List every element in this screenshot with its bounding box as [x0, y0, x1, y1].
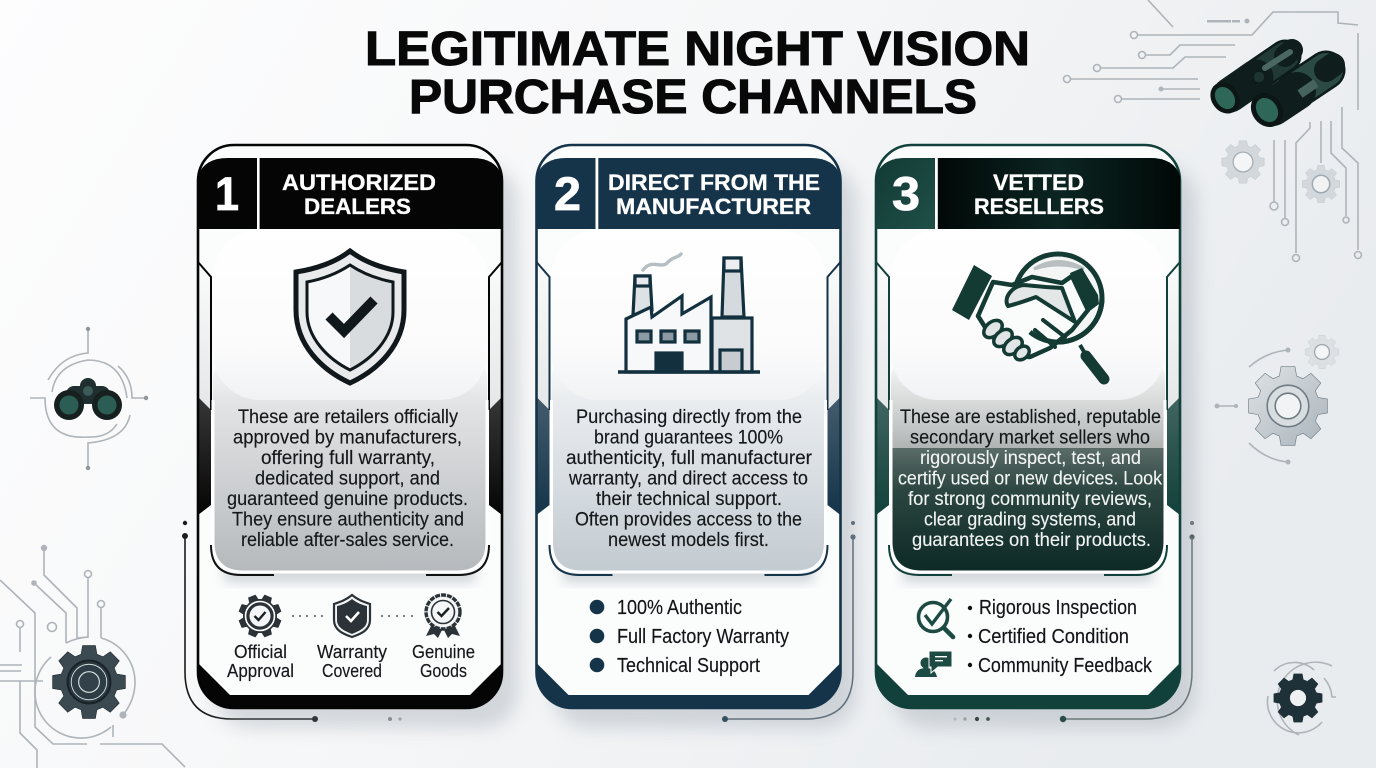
card 3 heading: VETTED	[993, 170, 1084, 195]
card 1 icon labels	[227, 642, 475, 681]
title: PURCHASE CHANNELS	[409, 71, 977, 124]
icon: gear top right 2	[1302, 165, 1340, 203]
icon: dark gear bottom left	[53, 646, 125, 718]
card 2 heading	[608, 170, 820, 219]
card 2 bullet list: Technical Support	[617, 655, 760, 677]
icon: night vision binoculars top right	[1204, 50, 1333, 133]
panel: card 2 direct from the manufacturer	[536, 145, 856, 728]
card 3 connector line	[954, 521, 1195, 722]
card 3 bullet list	[968, 597, 1153, 677]
card 3 heading: RESELLERS	[974, 194, 1104, 219]
card 2 description text: warranty, and direct access to	[568, 468, 808, 490]
card 3 number cell: 3	[892, 167, 920, 220]
icon: factory	[618, 254, 760, 372]
card 1 description panel	[211, 230, 489, 575]
card 1 description text: They ensure authenticity and	[232, 510, 464, 530]
card 1 description text	[227, 407, 468, 551]
card 1 heading: AUTHORIZED	[282, 170, 436, 195]
card 3 description text: These are established, reputable	[900, 407, 1161, 428]
card 1 icon labels: Approval	[227, 661, 294, 681]
card 3 bullet list: Certified Condition	[978, 626, 1129, 648]
card 1 number cell	[215, 158, 260, 229]
card 3 description text: for strong community reviews,	[908, 489, 1152, 510]
icon: inspection magnifier	[918, 599, 953, 637]
card 3 description text: clear grading systems, and	[924, 510, 1136, 530]
panel: card 3 vetted resellers	[876, 145, 1196, 728]
card 2 connector line	[722, 521, 856, 722]
card 1 number cell: 1	[215, 167, 239, 220]
card 3 bullet list: Rigorous Inspection	[979, 597, 1137, 619]
card 3 heading	[974, 170, 1104, 219]
title: LEGITIMATE NIGHT VISION	[365, 23, 1030, 76]
card 1 heading	[282, 170, 436, 219]
card 2 description text: Often provides access to the	[575, 510, 802, 530]
card 3 description text: secondary market sellers who	[910, 428, 1150, 448]
card 3 description panel	[889, 230, 1167, 575]
dotted connector 2	[381, 615, 413, 617]
dotted connector 1	[292, 615, 323, 617]
card 2 description text: brand guarantees 100%	[594, 428, 783, 448]
card 1 connector line	[182, 521, 402, 722]
card 1 description text: dedicated support, and	[255, 468, 440, 490]
icon: dark gear bottom right	[1267, 662, 1336, 735]
card 1 icon labels: Covered	[322, 661, 382, 681]
card 2 heading: MANUFACTURER	[616, 194, 811, 219]
card 1 description text: guaranteed genuine products.	[227, 489, 468, 510]
card 1 icon labels: Official	[234, 642, 287, 662]
icon: genuine goods ribbon	[426, 595, 460, 638]
card 1 heading: DEALERS	[304, 194, 411, 219]
circuit decoration: top right	[1064, 0, 1362, 262]
card 2 description text: newest models first.	[608, 530, 769, 551]
card 2 description text	[566, 407, 813, 551]
card 3 frame	[876, 145, 1196, 728]
card 2 description text: their technical support.	[596, 489, 782, 510]
icon: community feedback	[915, 651, 952, 677]
icon: gear top right 1	[1222, 141, 1264, 183]
card 1 icon labels: Goods	[420, 661, 467, 681]
card 1 description text: offering full warranty,	[261, 448, 435, 469]
icon: shield with check	[296, 251, 404, 383]
card 1 icon labels: Genuine	[412, 642, 475, 662]
icon: binoculars left with target rings	[30, 327, 148, 470]
card 2 heading: DIRECT FROM THE	[608, 170, 820, 195]
icon: handshake with magnifier	[952, 254, 1104, 379]
card 2 number cell: 2	[554, 167, 581, 220]
card 3 description text	[898, 407, 1162, 551]
card 2 frame	[536, 145, 856, 728]
circuit decoration: bottom left	[0, 545, 185, 768]
card 1 description text: reliable after-sales service.	[241, 530, 454, 551]
card 1 icon labels: Warranty	[317, 642, 387, 662]
icon: warranty shield	[334, 595, 370, 637]
card 1 description text: approved by manufacturers,	[233, 428, 462, 448]
card 3 header fill	[876, 158, 1180, 229]
card 2 description panel	[550, 230, 828, 575]
card 3 number cell	[892, 158, 938, 229]
card 2 number cell	[554, 158, 598, 229]
card 2 description text: Purchasing directly from the	[576, 407, 802, 428]
icon: official approval badge	[232, 588, 288, 644]
card 3 description text: rigorously inspect, test, and	[920, 448, 1141, 469]
panel: card 1 authorized dealers	[182, 145, 518, 728]
card 1 frame	[198, 145, 518, 728]
icon: gears right side	[1214, 335, 1339, 464]
title	[365, 23, 1030, 124]
card 3 description text: certify used or new devices. Look	[898, 468, 1162, 490]
card 3 description text: guarantees on their products.	[912, 530, 1151, 551]
card 2 bullet list	[590, 597, 789, 677]
card 2 bullet list: 100% Authentic	[617, 597, 742, 619]
card 2 description text: authenticity, full manufacturer	[566, 448, 813, 469]
card 1 description text: These are retailers officially	[238, 407, 458, 428]
card 2 bullet list: Full Factory Warranty	[617, 626, 789, 648]
card 3 bullet list: Community Feedback	[978, 655, 1153, 677]
